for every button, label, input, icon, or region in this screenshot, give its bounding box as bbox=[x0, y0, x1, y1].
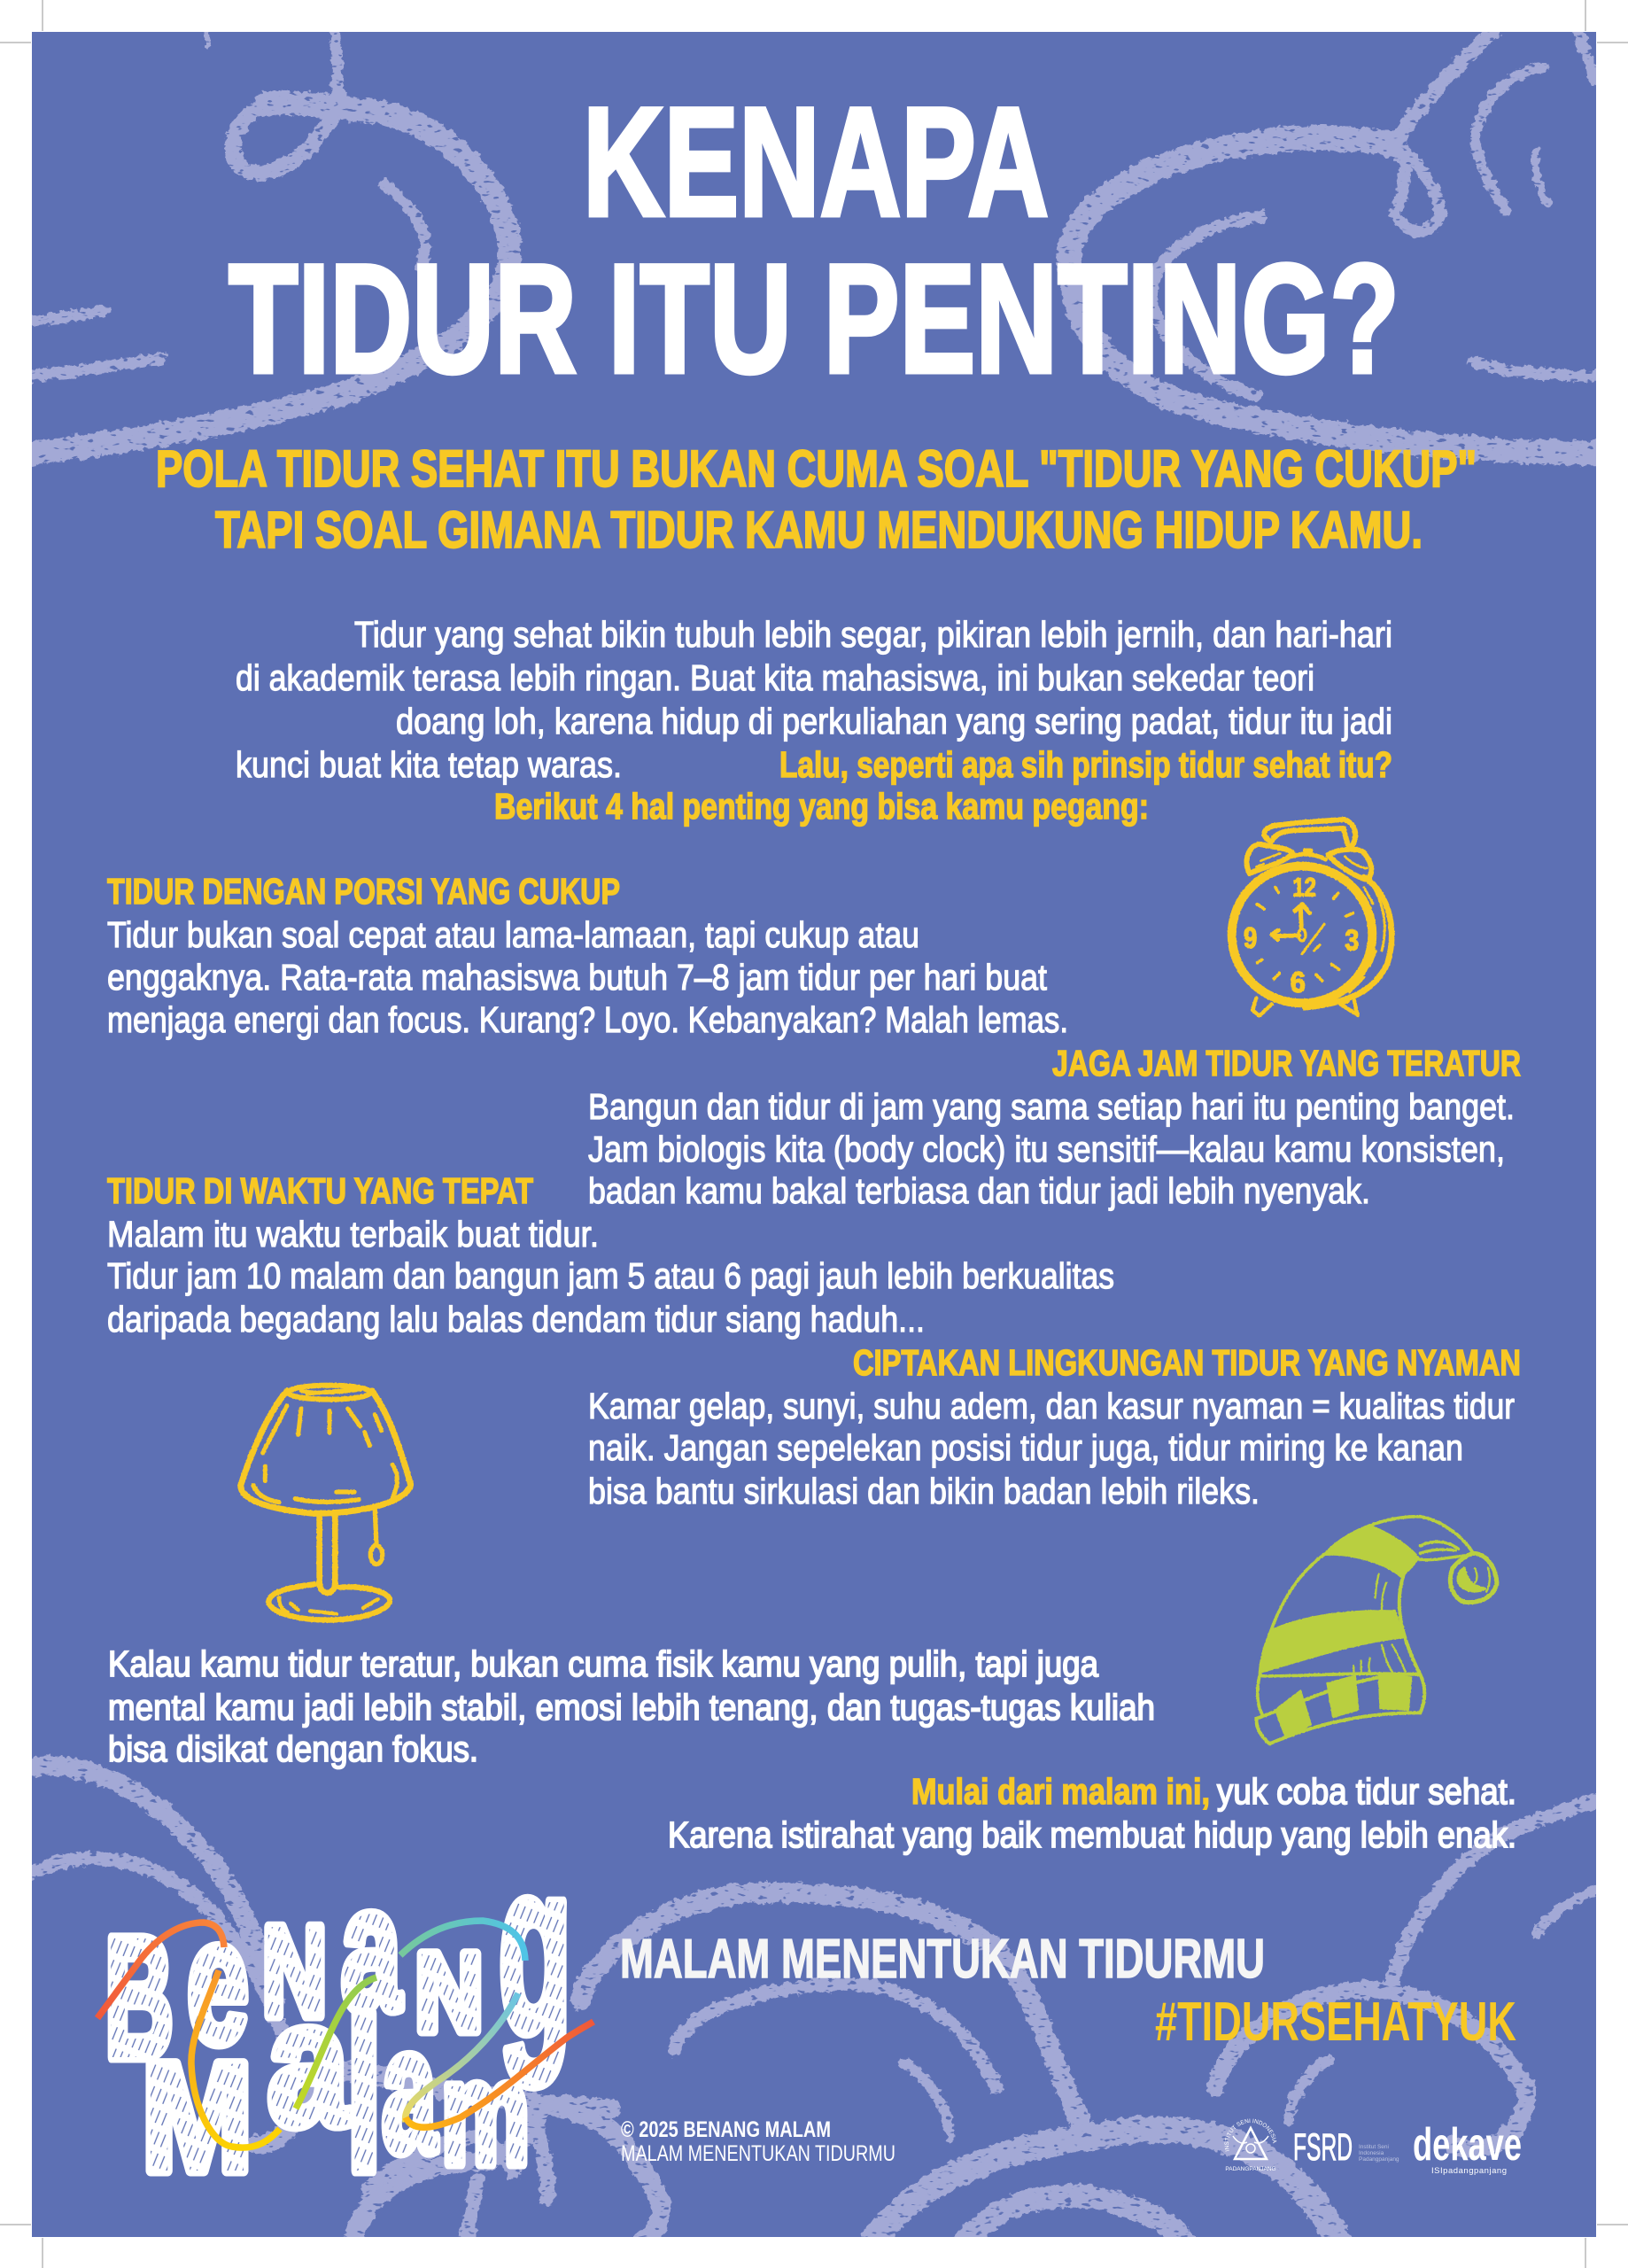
logo lettering: e bbox=[187, 1883, 249, 2080]
section: jaga jam tidur yang teratur: badan kamu bakal terbiasa dan tidur jadi lebih nyenyak. bbox=[588, 1170, 1370, 1211]
call to action: Karena istirahat yang baik membuat hidup yang lebih enak. bbox=[668, 1814, 1516, 1855]
section: ciptakan lingkungan tidur yang nyaman bbox=[588, 1342, 1521, 1511]
logo lettering: M bbox=[142, 2031, 252, 2204]
subtitle bbox=[156, 440, 1477, 559]
logo lettering: m bbox=[441, 2031, 530, 2194]
logo: dekave: ISIpadangpanjang bbox=[1431, 2166, 1507, 2176]
section: tidur dengan porsi yang cukup bbox=[107, 871, 1068, 1040]
section: tidur di waktu yang tepat: daripada begadang lalu balas dendam tidur siang haduh... bbox=[107, 1299, 925, 1340]
logo: Benang Malam: g bbox=[498, 1810, 572, 2087]
closing paragraph: Kalau kamu tidur teratur, bukan cuma fisik kamu yang pulih, tapi juga bbox=[108, 1643, 1098, 1684]
icon: table lamp bbox=[241, 1386, 411, 1620]
icon: alarm clock bbox=[1232, 819, 1392, 1016]
icon: alarm clock: 3 bbox=[1345, 925, 1359, 958]
logo lettering: B bbox=[105, 1901, 174, 2094]
logo: institute seal: PADANGPANJANG bbox=[1225, 2166, 1276, 2172]
logo: FSRD: Padangpanjang bbox=[1359, 2156, 1399, 2163]
intro text block: doang loh, karena hidup di perkuliahan yang sering padat, tidur itu jadi bbox=[396, 701, 1392, 742]
icon: sleeping cap bbox=[1256, 1517, 1497, 1744]
section: jaga jam tidur yang teratur: Jam biologis kita (body clock) itu sensitif—kalau kamu konsisten, bbox=[588, 1129, 1505, 1169]
intro text block: Berikut 4 hal penting yang bisa kamu pegang: bbox=[494, 786, 1149, 827]
logo lettering: a bbox=[267, 1965, 350, 2163]
swirl: bottom bbox=[32, 1766, 1603, 2241]
copyright: MALAM MENENTUKAN TIDURMU bbox=[621, 2141, 895, 2166]
call to action: Mulai dari malam ini, bbox=[911, 1771, 1210, 1812]
logo lettering: a bbox=[382, 1992, 438, 2189]
logo thread bbox=[97, 1921, 593, 2148]
logo: dekave bbox=[1413, 2119, 1522, 2176]
intro text block: di akademik terasa lebih ringan. Buat kita mahasiswa, ini bukan sekedar teori bbox=[236, 657, 1314, 698]
logo: FSRD: Indonesia bbox=[1359, 2150, 1384, 2156]
section: ciptakan lingkungan tidur yang nyaman: naik. Jangan sepelekan posisi tidur juga, tidur miring ke kanan bbox=[588, 1427, 1463, 1468]
logo lettering: N bbox=[415, 1931, 483, 2054]
closing paragraph: mental kamu jadi lebih stabil, emosi lebih tenang, dan tugas-tugas kuliah bbox=[108, 1687, 1155, 1728]
icon: alarm clock: 6 bbox=[1291, 967, 1306, 999]
logo lettering bbox=[105, 1810, 572, 2217]
title: KENAPA bbox=[583, 76, 1049, 249]
copyright bbox=[621, 2117, 895, 2166]
logo: Benang Malam bbox=[97, 1810, 593, 2217]
closing paragraph: bisa disikat dengan fokus. bbox=[108, 1728, 478, 1769]
closing paragraph bbox=[108, 1643, 1155, 1769]
logo: FSRD: FSRD bbox=[1293, 2126, 1353, 2169]
section: tidur dengan porsi yang cukup: TIDUR DENGAN PORSI YANG CUKUP bbox=[107, 871, 620, 912]
icon: alarm clock: 12 bbox=[1292, 874, 1316, 903]
section: jaga jam tidur yang teratur bbox=[588, 1043, 1521, 1211]
logo: dekave: dekave bbox=[1413, 2119, 1522, 2171]
section: tidur dengan porsi yang cukup: menjaga energi dan focus. Kurang? Loyo. Kebanyakan? Malah lemas. bbox=[107, 999, 1068, 1040]
section: tidur di waktu yang tepat: Tidur jam 10 malam dan bangun jam 5 atau 6 pagi jauh lebih berkualitas bbox=[107, 1255, 1114, 1296]
section: tidur di waktu yang tepat: TIDUR DI WAKTU YANG TEPAT bbox=[107, 1170, 533, 1211]
copyright: © 2025 BENANG MALAM bbox=[621, 2117, 831, 2142]
tagline: MALAM MENENTUKAN TIDURMU bbox=[620, 1929, 1265, 1990]
section: ciptakan lingkungan tidur yang nyaman: bisa bantu sirkulasi dan bikin badan lebih rileks. bbox=[588, 1471, 1260, 1511]
intro text block: Tidur yang sehat bikin tubuh lebih segar, pikiran lebih jernih, dan hari-hari bbox=[354, 614, 1392, 655]
swirl: top right bbox=[1069, 27, 1599, 454]
logo: institute seal bbox=[1224, 2119, 1277, 2172]
call to action: yuk coba tidur sehat. bbox=[1217, 1771, 1516, 1812]
logo: institute seal: INSTITUT SENI INDONESIA bbox=[1224, 2119, 1277, 2151]
logo: FSRD: Institut Seni bbox=[1359, 2144, 1389, 2150]
section: tidur dengan porsi yang cukup: Tidur bukan soal cepat atau lama-lamaan, tapi cukup atau bbox=[107, 914, 919, 955]
title bbox=[229, 76, 1399, 406]
logo lettering: N bbox=[262, 1899, 327, 2043]
section: tidur di waktu yang tepat bbox=[107, 1170, 1114, 1340]
swirl: top left bbox=[27, 27, 509, 454]
intro text block bbox=[236, 614, 1392, 827]
call to action bbox=[668, 1771, 1516, 1855]
section: jaga jam tidur yang teratur: Bangun dan tidur di jam yang sama setiap hari itu penting banget. bbox=[588, 1086, 1515, 1127]
logo lettering: l bbox=[345, 1974, 383, 2217]
logo lettering: a bbox=[341, 1850, 402, 2047]
section: tidur di waktu yang tepat: Malam itu waktu terbaik buat tidur. bbox=[107, 1214, 599, 1254]
section: tidur dengan porsi yang cukup: enggaknya. Rata-rata mahasiswa butuh 7–8 jam tidur per hari buat bbox=[107, 957, 1048, 998]
intro text block: kunci buat kita tetap waras. bbox=[236, 744, 622, 785]
intro text block: Lalu, seperti apa sih prinsip tidur sehat itu? bbox=[779, 744, 1392, 785]
icon: alarm clock: 9 bbox=[1244, 922, 1257, 955]
